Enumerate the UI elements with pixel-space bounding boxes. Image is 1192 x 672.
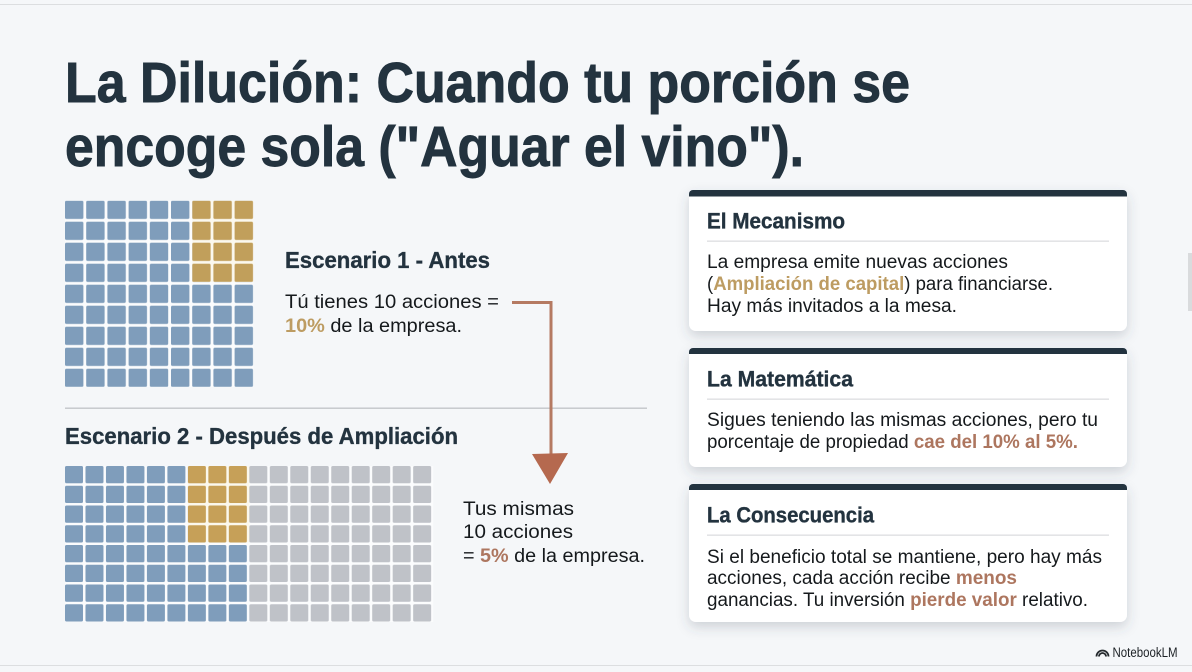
title: encoge sola ("Aguar el vino"). — [65, 115, 804, 179]
panel: La Consecuencia: ganancias. Tu inversión pierde valor relativo. — [707, 590, 1088, 611]
panel: El Mecanismo: El Mecanismo — [707, 208, 845, 234]
logo: NotebookLM: NotebookLM — [1112, 645, 1178, 660]
scenario 1 text: 10% de la empresa. — [285, 316, 462, 337]
panel: La Consecuencia: acciones, cada acción recibe menos — [707, 568, 1017, 589]
panel: La Consecuencia: La Consecuencia — [707, 502, 875, 528]
waffle chart: scenario 2 — [65, 466, 433, 622]
panel: La Matemática: La Matemática — [707, 366, 854, 392]
panel: El Mecanismo: (Ampliación de capital) para financiarse. — [707, 274, 1053, 295]
scenario 2 text — [463, 499, 645, 567]
scenario 1 heading: Escenario 1 - Antes — [285, 247, 490, 273]
panel: La Matemática — [689, 348, 1127, 467]
panel: El Mecanismo: La empresa emite nuevas acciones — [707, 252, 1008, 273]
scenario 1 text — [285, 292, 499, 337]
panel: La Matemática: Sigues teniendo las mismas acciones, pero tu — [707, 410, 1098, 431]
title — [65, 51, 910, 179]
panel: El Mecanismo — [689, 190, 1127, 331]
scenario 2 text: = 5% de la empresa. — [463, 546, 645, 567]
panel: La Consecuencia — [689, 484, 1127, 622]
divider — [65, 408, 647, 409]
scenario 1 text: Tú tienes 10 acciones = — [285, 292, 499, 313]
panel: El Mecanismo: Hay más invitados a la mesa. — [707, 296, 957, 317]
scenario 2 heading: Escenario 2 - Después de Ampliación — [65, 423, 458, 449]
scenario 2 text: 10 acciones — [463, 522, 573, 543]
arrow — [512, 302, 568, 484]
title: La Dilución: Cuando tu porción se — [65, 51, 910, 115]
scenario 2 text: Tus mismas — [463, 499, 574, 520]
panel: La Matemática: porcentaje de propiedad cae del 10% al 5%. — [707, 432, 1078, 453]
waffle chart: scenario 1 — [65, 201, 253, 387]
panel: La Consecuencia: Si el beneficio total se mantiene, pero hay más — [707, 547, 1102, 568]
